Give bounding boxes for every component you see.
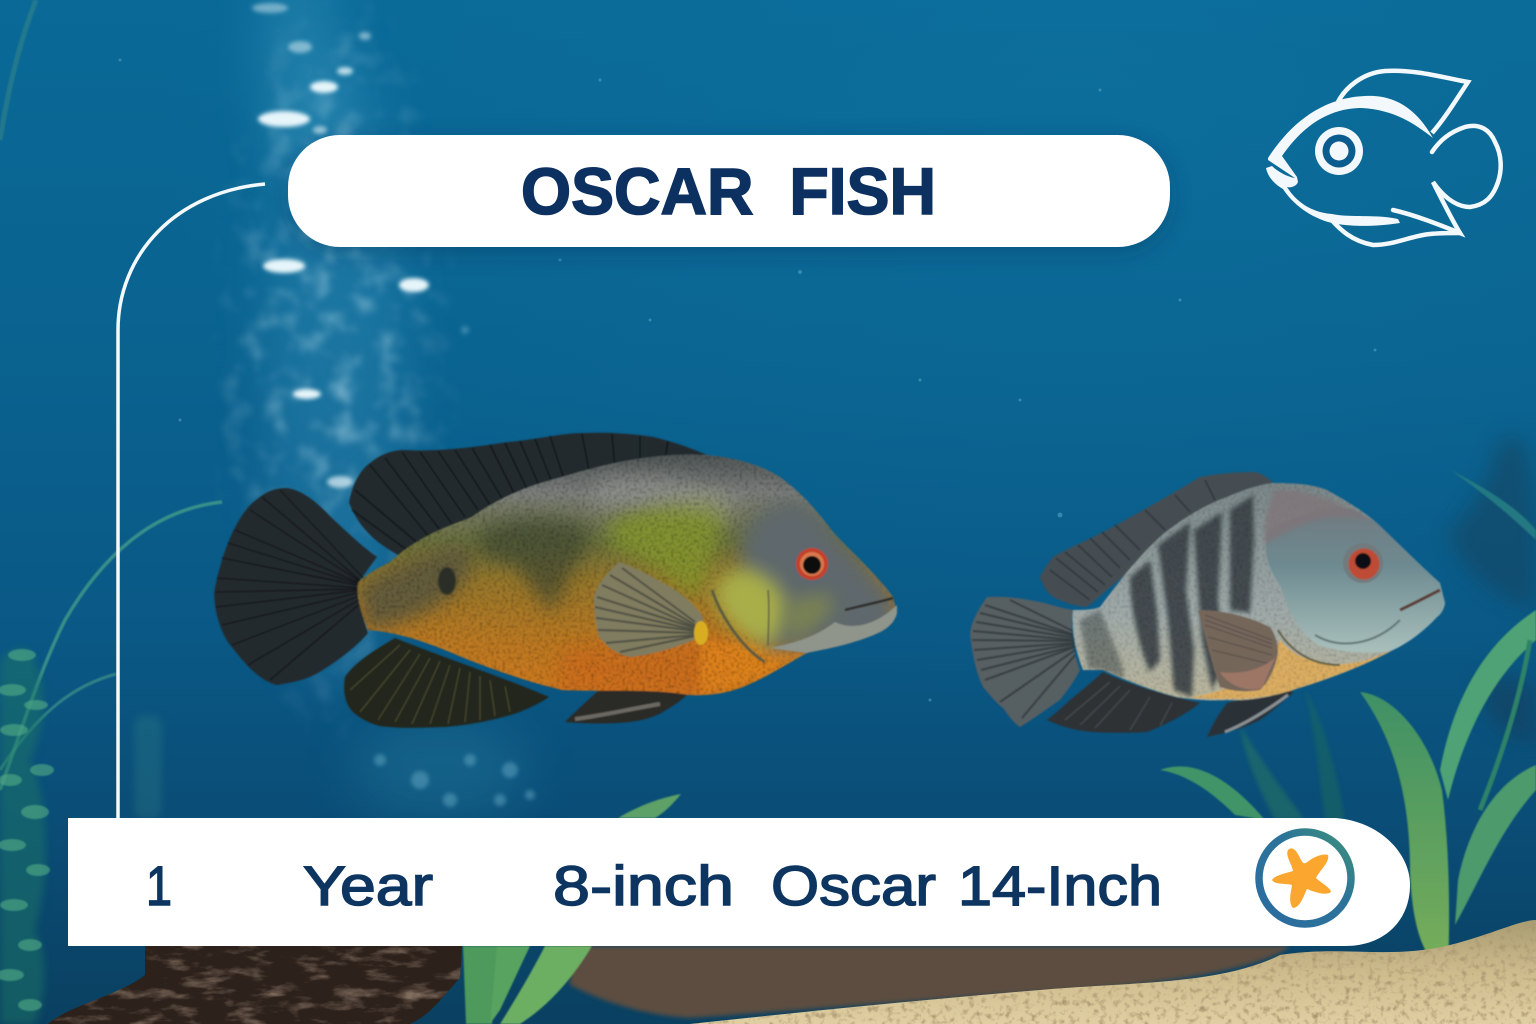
fish outline icon bbox=[1266, 71, 1501, 245]
dorsal fin bbox=[1040, 472, 1273, 607]
small oscar fish bbox=[970, 470, 1450, 737]
floating specks bbox=[118, 58, 1376, 702]
anal fin bbox=[1047, 672, 1200, 733]
pelvic fin bbox=[1207, 688, 1293, 737]
driftwood log bbox=[570, 946, 1290, 1018]
bar text: 8-inch bbox=[553, 854, 734, 917]
bottom info bar bbox=[68, 818, 1410, 946]
foreground leaves bbox=[463, 794, 681, 1024]
body bbox=[356, 454, 896, 696]
bubble column bbox=[190, 0, 535, 820]
body bbox=[1071, 482, 1394, 702]
bar text bbox=[146, 854, 1162, 917]
bar text: Oscar bbox=[771, 854, 936, 917]
tail fin bbox=[214, 488, 377, 685]
left plant bbox=[0, 0, 222, 1024]
eye bbox=[791, 543, 833, 585]
pelvic fin bbox=[565, 688, 689, 724]
distant plant shadows bbox=[134, 438, 1536, 820]
head bbox=[1264, 490, 1445, 665]
large oscar fish bbox=[214, 430, 910, 728]
connector line bbox=[118, 184, 265, 818]
bar text: 14-Inch bbox=[958, 854, 1162, 917]
starfish badge bbox=[1259, 832, 1351, 924]
dark stripes bbox=[1080, 495, 1254, 697]
dorsal fin bbox=[349, 433, 707, 558]
icon eye bbox=[1315, 127, 1363, 175]
pectoral fin bbox=[1198, 610, 1278, 691]
bar text: 1 bbox=[146, 854, 172, 917]
sand bbox=[680, 915, 1536, 1024]
title text: OSCAR FISH bbox=[521, 154, 936, 228]
title banner bbox=[288, 135, 1170, 247]
rock bbox=[40, 946, 465, 1024]
pectoral fin bbox=[594, 562, 708, 657]
tail fin bbox=[970, 597, 1080, 727]
right plants bbox=[1160, 610, 1536, 970]
anal fin bbox=[344, 638, 549, 728]
bar text: Year bbox=[303, 854, 433, 917]
head bbox=[712, 500, 900, 662]
eye bbox=[1343, 543, 1383, 583]
